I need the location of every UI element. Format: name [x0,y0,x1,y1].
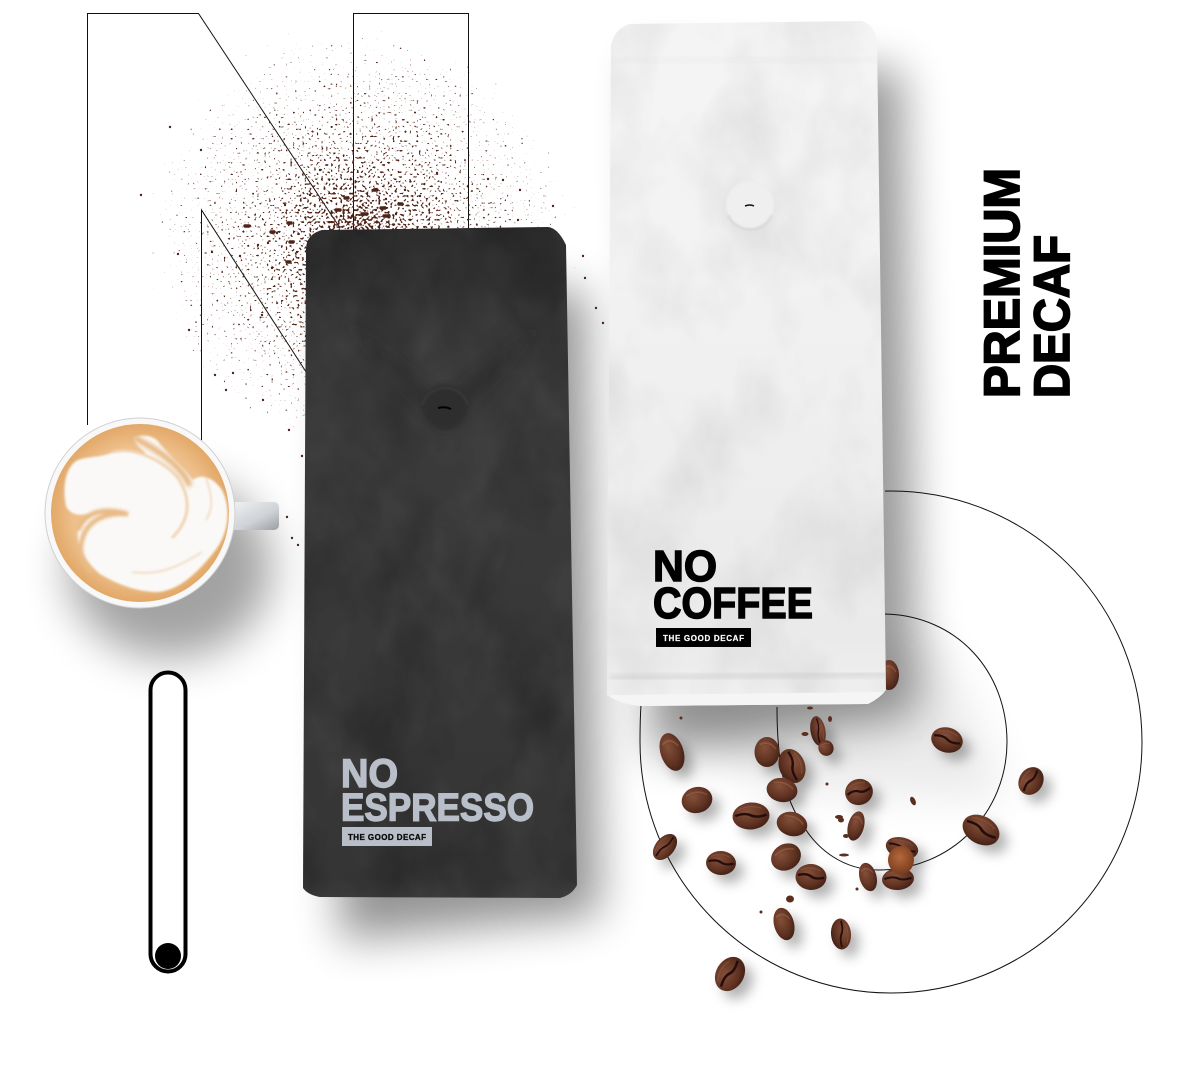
shadow: white bag [640,60,918,755]
label line: COFFEE: COFFEE [653,579,813,628]
coffee grounds scatter [100,0,620,580]
white bag label [653,542,813,647]
vertical heading: PREMIUM DECAF [974,168,1080,398]
inner concentric arc [777,614,1007,870]
outer concentric arc [640,491,1142,993]
white bag [605,20,890,710]
heading line: DECAF: DECAF [1024,235,1080,398]
letter N outline [88,14,468,445]
black bag valve [422,384,468,430]
white bag texture [605,20,890,710]
cup handle [226,502,279,530]
bean partly behind white bag [879,660,899,690]
label tag: THE GOOD DECAF [348,833,426,842]
black bag texture [300,225,580,900]
shadow: cup [68,478,272,658]
coffee cup [45,418,279,608]
bean crumbs [680,706,917,914]
slider pill [150,672,186,972]
heading line: PREMIUM: PREMIUM [974,168,1030,398]
label tag: THE GOOD DECAF [663,634,744,643]
label line: NO: NO [341,752,398,796]
coffee [51,424,229,602]
label tag [656,628,751,647]
larger coffee grains [141,127,603,545]
cup rim [45,418,235,608]
milk foam swirl [64,436,228,592]
label tag [342,827,432,846]
black bag [300,225,580,900]
slider dot [155,943,181,969]
label line: NO: NO [653,542,717,591]
white bag valve [726,181,774,229]
soft wide shadow below white bag [660,640,1010,800]
shadow: black bag [335,290,600,940]
label line: ESPRESSO: ESPRESSO [341,786,534,830]
white bag body [607,21,886,706]
black bag label [341,752,534,846]
scattered coffee beans [648,715,1049,997]
black bag body [303,227,577,898]
